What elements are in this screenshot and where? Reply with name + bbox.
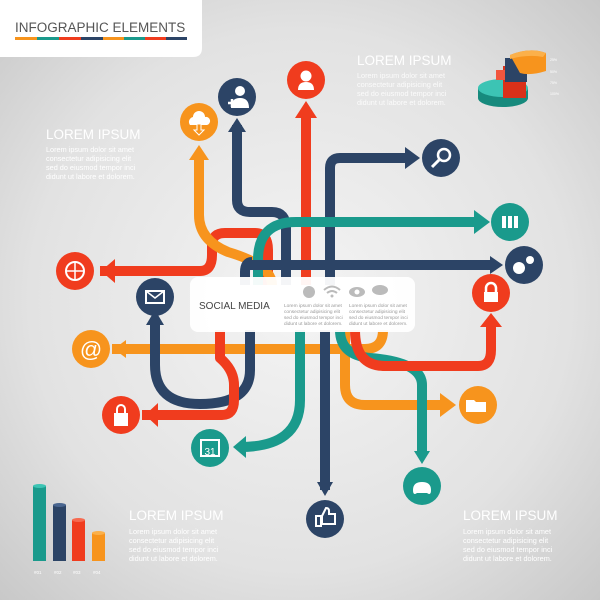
panel: social media: SOCIAL MEDIA: [199, 301, 270, 312]
text block: bottom right: sed do eiusmod tempor inci: [463, 545, 553, 554]
panel: social media: consectetur adipisicing elit: [349, 309, 406, 315]
arrows network: [100, 115, 492, 490]
icon circles: @: [80, 337, 102, 362]
panel: social media: Lorem ipsum dolor sit amet: [284, 303, 343, 309]
chart: 3d pie: 50%: [550, 70, 557, 74]
text block: bottom right: didunt ut labore et dolorem.: [463, 554, 552, 563]
text block: left: Lorem ipsum dolor sit amet: [46, 145, 134, 154]
text block: top right: [357, 53, 452, 107]
title box: INFOGRAPHIC ELEMENTS: [15, 20, 185, 35]
text block: left: sed do eiusmod tempor inci: [46, 163, 136, 172]
text block: top right: Lorem ipsum dolor sit amet: [357, 71, 445, 80]
text block: bottom left: didunt ut labore et dolorem.: [129, 554, 218, 563]
panel: social media: Lorem ipsum dolor sit amet: [349, 303, 408, 309]
chart: bars: #04: [93, 570, 101, 575]
panel: social media: didunt ut labore et dolorem.: [349, 321, 407, 327]
icon circles: 31: [204, 447, 216, 458]
title box: [0, 0, 202, 57]
chart: bars: [33, 484, 105, 575]
text block: bottom left: consectetur adipisicing elit: [129, 536, 214, 545]
text block: bottom left: LOREM IPSUM: [129, 508, 224, 523]
text block: bottom left: Lorem ipsum dolor sit amet: [129, 527, 217, 536]
text block: top right: didunt ut labore et dolorem.: [357, 98, 446, 107]
chart: bars: #03: [73, 570, 81, 575]
panel: social media: didunt ut labore et dolorem.: [284, 321, 342, 327]
text block: bottom right: [463, 508, 558, 563]
text block: top right: consectetur adipisicing elit: [357, 80, 442, 89]
chart: 3d pie: [478, 50, 559, 107]
text block: top right: sed do eiusmod tempor inci: [357, 89, 447, 98]
text block: bottom left: [129, 508, 224, 563]
chart: 3d pie: 25%: [550, 58, 557, 62]
text block: left: [46, 127, 141, 181]
panel: social media: sed do eiusmod tempor inci: [349, 315, 408, 321]
text block: bottom left: sed do eiusmod tempor inci: [129, 545, 219, 554]
chart: bars: #02: [54, 570, 62, 575]
text block: left: didunt ut labore et dolorem.: [46, 172, 135, 181]
text block: bottom right: Lorem ipsum dolor sit amet: [463, 527, 551, 536]
arrowheads: [101, 101, 503, 496]
text block: bottom right: consectetur adipisicing elit: [463, 536, 548, 545]
chart: 3d pie: 75%: [550, 81, 557, 85]
text block: top right: LOREM IPSUM: [357, 53, 452, 68]
panel: social media: [190, 277, 415, 332]
text block: bottom right: LOREM IPSUM: [463, 508, 558, 523]
panel: social media: consectetur adipisicing elit: [284, 309, 341, 315]
chart: 3d pie: 100%: [550, 92, 559, 96]
text block: left: consectetur adipisicing elit: [46, 154, 131, 163]
chart: bars: #01: [34, 570, 42, 575]
icon circles: [56, 61, 543, 538]
panel: social media: sed do eiusmod tempor inci: [284, 315, 343, 321]
text block: left: LOREM IPSUM: [46, 127, 141, 142]
